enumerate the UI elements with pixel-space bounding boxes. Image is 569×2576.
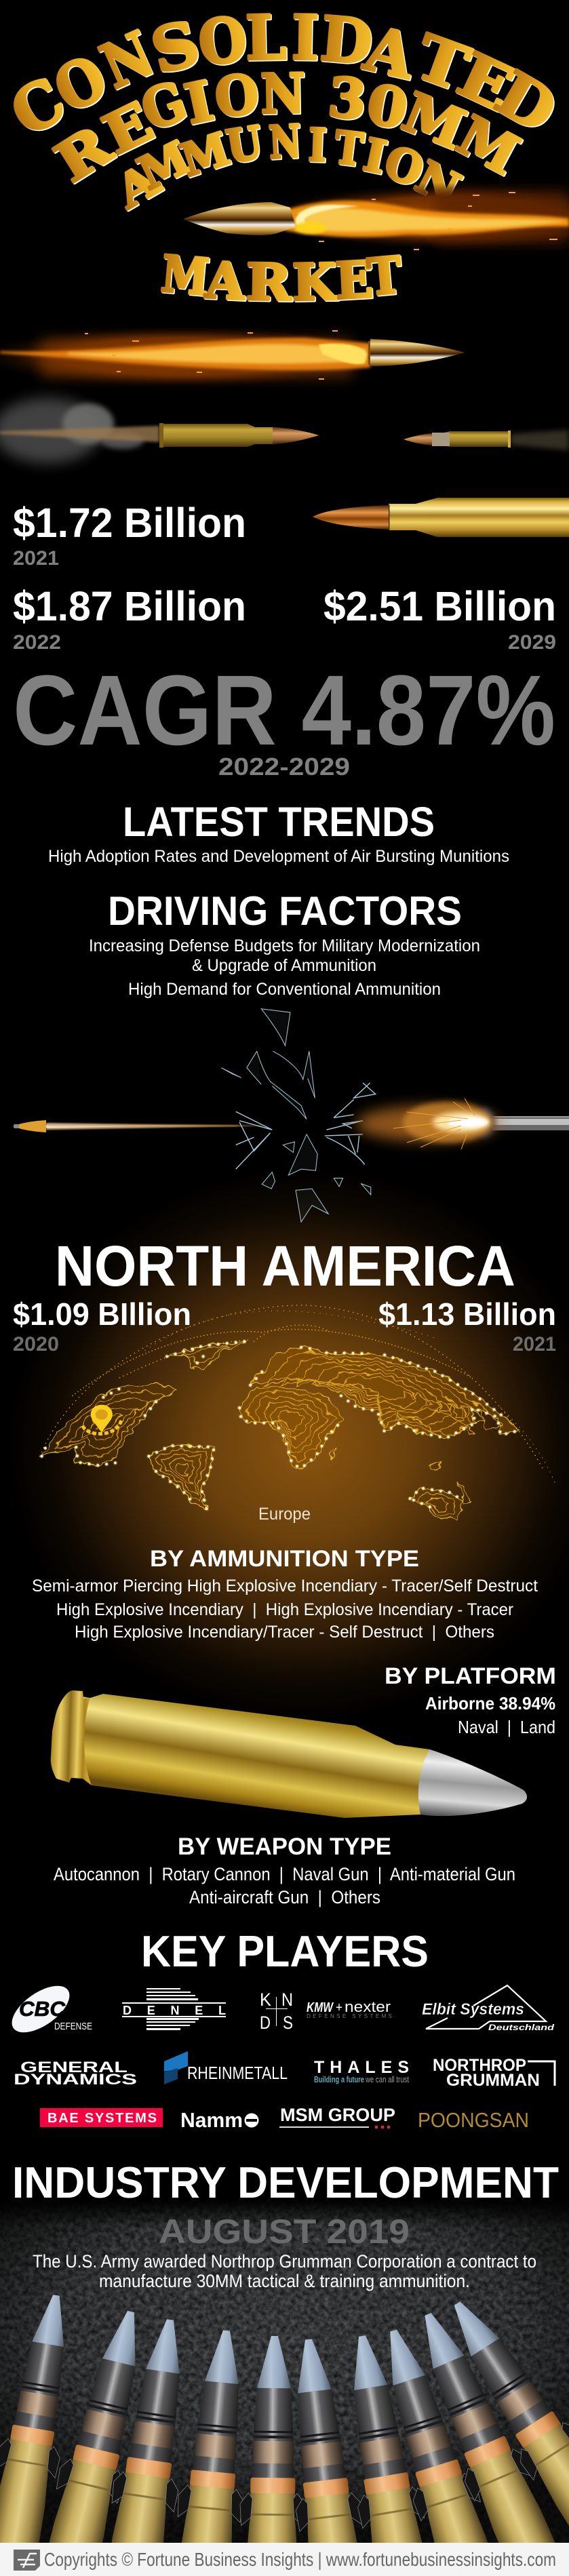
heading: industry development: INDUSTRY DEVELOPMENT <box>12 2158 559 2207</box>
title line: MARKET: K <box>292 253 338 313</box>
panel: industry development photo background <box>0 2200 569 2543</box>
title line: AMMUNITION: O <box>378 136 429 197</box>
title line: REGION 30MM: E <box>94 90 162 167</box>
section: by platform: Naval | Land <box>458 1717 555 1737</box>
logo: KNDS: S <box>283 2013 293 2033</box>
section: by ammunition type: High Explosive Incendiary | High Explosive Incendiary - Tracer <box>56 1600 513 1619</box>
footer <box>0 2543 569 2576</box>
title line: MARKET: M <box>159 245 211 307</box>
title line: CONSOLIDATED: N <box>91 17 163 102</box>
logo: Elbit Systems Deutschland: Elbit Systems <box>422 2000 524 2019</box>
icon: flaming bullet flying right <box>0 325 465 388</box>
logo: MSM Group: MSM GROUP <box>280 2105 395 2125</box>
title line: REGION 30MM: R <box>45 113 123 195</box>
logo: Thales: Building a future <box>314 2075 364 2084</box>
logo: General Dynamics: GENERAL <box>20 2059 127 2076</box>
title line: REGION 30MM: 3 <box>326 65 369 132</box>
stat: North America 2021: 2021 <box>513 1333 556 1355</box>
title line: MARKET: R <box>246 253 292 313</box>
contour lines of continents <box>42 1341 519 1520</box>
logo: CBC Defense <box>4 1977 92 2042</box>
icon: Fortune Business Insights logo <box>14 2550 40 2571</box>
title line: REGION 30MM: M <box>447 103 529 187</box>
heading: North America: NORTH AMERICA <box>55 1234 515 1298</box>
title line: MARKET: T <box>366 245 404 307</box>
logo: KMW + Nexter <box>307 1998 392 2019</box>
glowing coastal dots <box>42 1341 519 1509</box>
logo: KNDS: D <box>260 2013 271 2033</box>
stat: 2029 market size: $2.51 Billion <box>323 583 556 629</box>
stat: North America 2020: $1.09 BIllion <box>13 1296 191 1332</box>
section: driving factors: DRIVING FACTORS <box>108 888 462 934</box>
section: driving factors <box>89 888 480 999</box>
logo: KMW + Nexter: KMW <box>307 2000 334 2015</box>
title line: CONSOLIDATED: E <box>448 39 524 125</box>
text: development description: manufacture 30MM tactical & training ammunition. <box>99 2271 470 2291</box>
logo: Rheinmetall: RHEINMETALL <box>187 2063 288 2083</box>
logo: Nammo: Namm <box>180 2108 243 2132</box>
title line: REGION 30MM: 0 <box>362 72 412 142</box>
title line: CONSOLIDATED <box>0 1 568 151</box>
logo: Denel <box>122 1988 226 2030</box>
icon: muzzle flash and barrel <box>356 1098 569 1149</box>
logo: KMW + Nexter: + <box>336 2000 342 2015</box>
section: latest trends <box>48 799 509 866</box>
section: by platform: Airborne 38.94% <box>425 1693 555 1713</box>
title line: AMMUNITION <box>106 114 468 219</box>
title line: MARKET: A <box>203 252 247 312</box>
icon: flaming bullet flying left <box>183 183 569 251</box>
title line: AMMUNITION: T <box>331 121 366 176</box>
panel: map glow background <box>7 1166 569 1722</box>
stat: 2021 market size <box>13 500 246 570</box>
title line: AMMUNITION: N <box>267 114 302 169</box>
logo: General Dynamics: DYNAMICS <box>14 2071 137 2088</box>
title line: CONSOLIDATED: L <box>245 1 287 74</box>
logo: Northrop Grumman: GRUMMAN <box>446 2071 540 2090</box>
logo: KNDS: N <box>281 1989 293 2010</box>
section: by weapon type: Autocannon | Rotary Cannon | Naval Gun | Anti-material Gun <box>54 1864 515 1884</box>
text: development description <box>33 2251 536 2291</box>
world map with glowing coastlines <box>40 1305 555 1520</box>
section: by ammunition type: Semi-armor Piercing High Explosive Incendiary - Tracer/Self Destruct <box>32 1577 538 1596</box>
section: driving factors: High Demand for Conventional Ammunition <box>128 980 441 999</box>
section: by ammunition type: BY AMMUNITION TYPE <box>150 1546 419 1572</box>
logo: Denel: DENEL <box>123 2004 226 2017</box>
logo: KNDS <box>260 1989 293 2033</box>
title line: CONSOLIDATED: D <box>318 3 375 78</box>
icon: distant bullet flying left <box>404 430 569 450</box>
logo: Thales: we can all trust <box>365 2075 409 2084</box>
title line: REGION 30MM <box>45 62 529 195</box>
stat: 2029 market size <box>323 583 556 654</box>
icon: small bullet with trail <box>14 1120 271 1132</box>
section: by ammunition type <box>32 1546 538 1642</box>
stat: 2029 market size: 2029 <box>508 631 556 654</box>
title: Consolidated Region 30MM Ammunition Market <box>0 1 568 313</box>
logo: CBC Defense: DEFENSE <box>54 2021 92 2032</box>
stat: North America 2021: $1.13 Billion <box>378 1296 556 1332</box>
section: by platform <box>385 1663 556 1737</box>
logo: BAE Systems: BAE SYSTEMS <box>47 2111 157 2126</box>
title line: AMMUNITION: U <box>222 115 266 173</box>
heading: key players: KEY PLAYERS <box>141 1926 429 1976</box>
title line: CONSOLIDATED: S <box>144 6 206 87</box>
title line: REGION 30MM: I <box>179 69 218 137</box>
stat: 2022 market size <box>13 583 246 654</box>
title line: AMMUNITION: N <box>408 150 468 216</box>
photo: row of 30mm ammunition rounds <box>0 2286 569 2576</box>
title line: REGION 30MM: N <box>260 62 306 125</box>
section: by ammunition type: High Explosive Incendiary/Tracer - Self Destruct | Others <box>75 1623 494 1642</box>
stat: 2022 market size: $1.87 Billion <box>13 583 246 629</box>
stat: CAGR: 2022-2029 <box>218 753 350 780</box>
title line: CONSOLIDATED: O <box>43 42 118 127</box>
logo: KMW + Nexter: nexter <box>345 1998 391 2015</box>
stat: North America 2021 <box>378 1296 556 1355</box>
icon: shattering glass <box>221 1009 376 1222</box>
section: latest trends: LATEST TRENDS <box>123 799 435 845</box>
stat: 2021 market size: 2021 <box>13 547 59 570</box>
logo: Elbit Systems Deutschland <box>422 1985 555 2032</box>
section: by weapon type: Anti-aircraft Gun | Others <box>189 1887 380 1907</box>
logo: Elbit Systems Deutschland: Deutschland <box>488 2023 555 2032</box>
title line: CONSOLIDATED: T <box>406 21 477 105</box>
title line: CONSOLIDATED: C <box>0 64 77 151</box>
title line: AMMUNITION: I <box>307 119 327 172</box>
icon: large cartridge with silver tip <box>51 1690 527 1818</box>
logo: Northrop Grumman: NORTHROP <box>433 2056 526 2075</box>
title line: CONSOLIDATED: I <box>291 2 319 74</box>
icon: bullet with smoke trail <box>0 398 319 463</box>
stat: North America 2020: 2020 <box>13 1333 59 1355</box>
title line: MARKET <box>159 245 404 313</box>
logo: KNDS: K <box>260 1989 271 2010</box>
date: August 2019: AUGUST 2019 <box>159 2213 410 2251</box>
title line: MARKET: E <box>334 250 374 311</box>
title line: REGION 30MM: M <box>394 80 473 161</box>
title line: REGION 30MM: G <box>134 69 195 143</box>
section: by weapon type <box>54 1834 515 1907</box>
section: latest trends: High Adoption Rates and Development of Air Bursting Munitions <box>48 847 509 866</box>
logo: Thales: THALES <box>314 2058 409 2077</box>
stat: 2022 market size: 2022 <box>13 631 61 654</box>
logo: Poongsan: POONGSAN <box>418 2108 529 2132</box>
title line: AMMUNITION: M <box>175 123 235 187</box>
title line: AMMUNITION: A <box>106 153 168 219</box>
section: driving factors: & Upgrade of Ammunition <box>192 956 376 975</box>
logo: General Dynamics <box>14 2059 137 2088</box>
title line: AMMUNITION: I <box>359 128 391 184</box>
logo: CBC Defense: CBC <box>19 1997 66 2021</box>
stat: North America 2020 <box>13 1296 191 1355</box>
logo: KMW + Nexter: DEFENSE SYSTEMS <box>307 2013 392 2019</box>
title line: REGION 30MM: O <box>212 62 261 130</box>
section: by platform: BY PLATFORM <box>385 1663 556 1689</box>
logo: Rheinmetall <box>164 2051 288 2084</box>
icon: large brass cartridge <box>313 498 569 537</box>
section: by weapon type: BY WEAPON TYPE <box>178 1834 391 1860</box>
icon: location pin on North America <box>83 1405 121 1434</box>
title line: CONSOLIDATED: A <box>358 12 422 94</box>
title line: AMMUNITION: M <box>130 131 197 200</box>
stat: 2021 market size: $1.72 Billion <box>13 500 246 546</box>
logo: BAE Systems <box>40 2108 163 2127</box>
section: driving factors: Increasing Defense Budgets for Military Modernization <box>89 936 480 955</box>
title line: CONSOLIDATED: O <box>195 4 250 79</box>
logo: Northrop Grumman <box>433 2056 555 2090</box>
title line: CONSOLIDATED: D <box>484 57 568 147</box>
map label: Europe: Europe <box>258 1505 311 1524</box>
